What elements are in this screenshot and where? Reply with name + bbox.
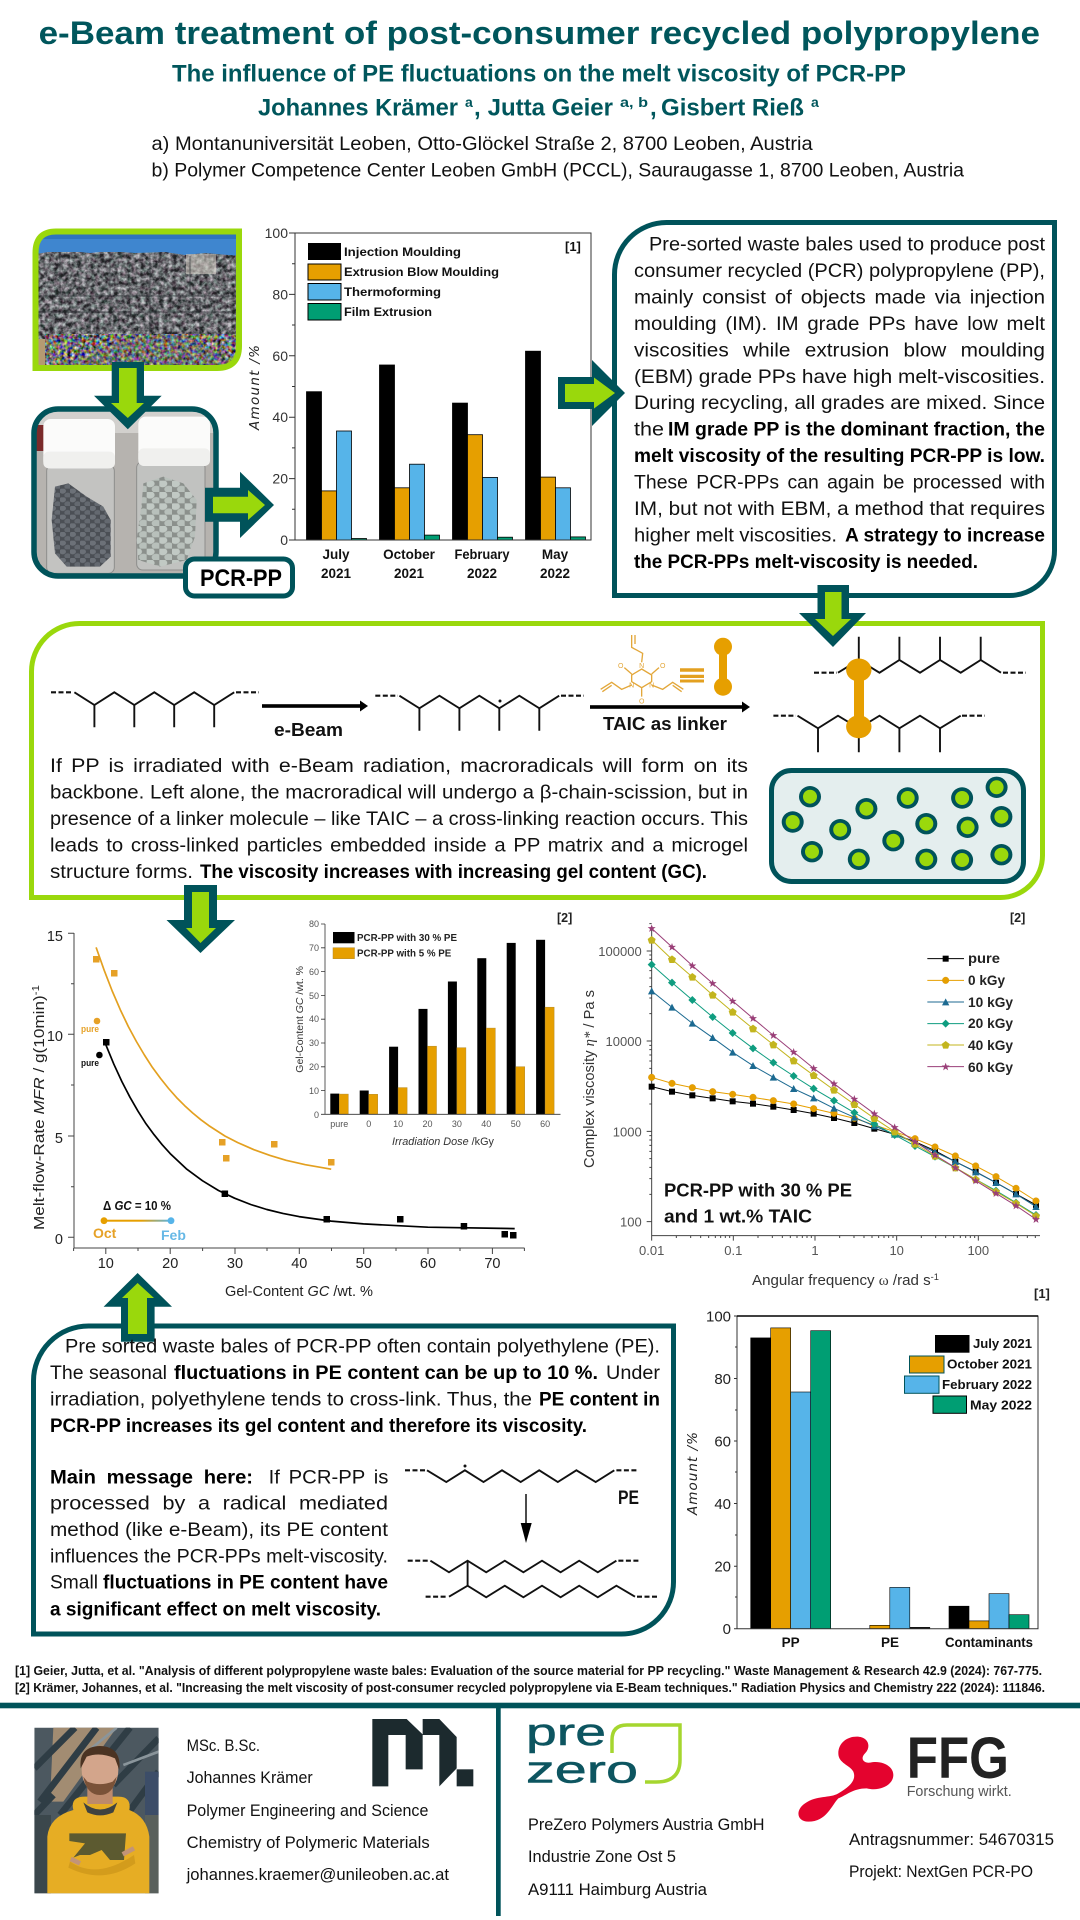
legend: Film Extrusion	[344, 305, 432, 319]
axis labels: 60	[272, 348, 288, 364]
photo: author portrait	[34, 1728, 159, 1893]
chart: MFR vs gel content: 70	[484, 1256, 500, 1272]
arrow: chart to text	[558, 360, 625, 426]
chain: cross-linked upper	[814, 637, 1026, 673]
panel: PE fluctuations	[34, 1273, 674, 1634]
chart: complex viscosity: 100	[620, 1215, 642, 1230]
arrow: e-Beam	[262, 700, 368, 740]
affiliations: a) Montanuniversität Leoben, Otto-Glöckel Straße 2, 8700 Leoben, Austria	[152, 133, 813, 155]
chart: complex viscosity: 0.1	[724, 1243, 742, 1258]
series: 10 kGy	[652, 991, 1036, 1207]
bar chart: amount by processing method: 2022	[467, 566, 497, 581]
authors: a, b	[620, 94, 648, 110]
panel: PE fluctuations: method (like e-Beam), its PE content	[50, 1519, 389, 1541]
panel: PE fluctuations: The seasonal	[50, 1362, 167, 1384]
authors: a	[465, 94, 473, 110]
paragraph: leads to cross-linked particles embedded inside a PP matrix and a microgel	[50, 835, 748, 857]
panel: recycling problem text: IM grade PP is the dominant fraction, the	[668, 419, 1045, 441]
PreZero address: A9111 Haimburg Austria	[528, 1881, 708, 1899]
inset chart: gel content vs dose: 10	[393, 1119, 403, 1129]
arrow: TAIC as linker: TAIC as linker	[603, 714, 727, 734]
chart: MFR vs gel content: 10	[47, 1029, 63, 1045]
legend: May 2022	[970, 1397, 1032, 1412]
bar chart: composition: 20	[714, 1558, 731, 1576]
arrow: panel to MFR chart	[166, 885, 235, 953]
bottle: dark pellets	[43, 419, 115, 573]
chart: complex viscosity: 100	[967, 1243, 989, 1258]
chain: cross-linked lower	[773, 716, 985, 752]
author details: MSc. B.Sc.	[187, 1737, 260, 1755]
series: 0 kGy	[652, 1077, 1036, 1201]
bar chart: amount by processing method: 2022	[540, 566, 570, 581]
authors: Jutta Geier	[488, 95, 613, 122]
inset chart: gel content vs dose: 0	[314, 1110, 319, 1120]
y axis title: Amount /%	[247, 345, 263, 431]
inset chart: gel content vs dose: 0	[366, 1119, 371, 1129]
legend: Injection Moulding	[344, 245, 461, 259]
arrow: TAIC as linker	[590, 702, 750, 734]
references	[15, 1663, 1045, 1695]
bar chart: amount by processing method: 2021	[321, 566, 352, 581]
panel: PE fluctuations: Small	[50, 1572, 98, 1594]
title: e-Beam treatment of post-consumer recycled polypropylene	[39, 15, 1040, 51]
bar chart: composition: 0	[723, 1621, 731, 1638]
TAIC molecule: N	[649, 682, 654, 689]
panel: recycling problem text: These PCR-PPs can again be processed with	[634, 472, 1045, 494]
FFG project details	[849, 1831, 1054, 1881]
chart: complex viscosity: 0.01	[639, 1243, 664, 1258]
panel: e-beam cross-linking	[32, 624, 1042, 898]
panel: recycling problem text: higher melt viscosities.	[634, 524, 837, 546]
authors	[258, 94, 819, 122]
arrow: e-Beam: e-Beam	[274, 720, 343, 740]
inset chart: gel content vs dose: 80	[309, 919, 319, 929]
chart: complex viscosity: 0 kGy	[968, 972, 1005, 988]
bar chart: composition: PP	[782, 1635, 800, 1650]
panel: recycling problem text: melt viscosity of the resulting PCR-PP is low.	[634, 445, 1045, 467]
chart: complex viscosity: 10	[889, 1243, 904, 1258]
chart: complex viscosity: 10 kGy	[968, 994, 1013, 1010]
panel: recycling problem text: (EBM) grade PPs have high melt-viscosities.	[634, 366, 1045, 388]
legend: October 2021	[947, 1357, 1032, 1372]
inset chart: gel content vs dose: Irradiation Dose /kGy	[392, 1136, 494, 1148]
authors: a	[811, 94, 819, 110]
PE chain radical	[405, 1464, 637, 1482]
authors: ,	[650, 95, 657, 122]
inset chart: gel content vs dose: 20	[422, 1119, 433, 1129]
legend	[904, 1335, 1032, 1413]
affiliations	[152, 133, 964, 182]
subtitle: The influence of PE fluctuations on the melt viscosity of PCR-PP	[172, 61, 906, 88]
legend: February 2022	[942, 1377, 1032, 1392]
inset chart: gel content vs dose: [2]	[557, 911, 572, 925]
bar chart: amount by processing method: February	[454, 547, 510, 562]
arrow: text to panel	[799, 585, 866, 647]
panel: recycling problem text: mainly consist of objects made via injection	[634, 286, 1045, 308]
legend: Thermoforming	[344, 285, 441, 299]
panel: recycling problem text: the PCR-PPs melt-viscosity is needed.	[634, 551, 978, 573]
microgel structure	[772, 770, 1024, 882]
fit curves	[106, 1045, 515, 1229]
cross-link dumbbell	[846, 658, 872, 738]
symbol: equivalent	[680, 668, 704, 682]
inset chart: gel content vs dose: 60	[309, 967, 319, 977]
delta GC annotation: Feb	[161, 1227, 186, 1243]
author details: Johannes Krämer	[187, 1769, 313, 1787]
bars	[306, 351, 586, 540]
chart: complex viscosity: [1]	[1034, 1286, 1050, 1301]
panel: recycling problem text: moulding (IM). IM grade PPs have low melt	[634, 313, 1046, 335]
delta GC annotation: Δ GC = 10 %	[103, 1199, 171, 1213]
chart: complex viscosity: 1000	[613, 1124, 642, 1139]
panel: PE fluctuations: irradiation, polyethylene tends to cross-link. Thus, the	[50, 1388, 532, 1410]
y axis title: -1	[31, 985, 42, 995]
author details: johannes.kraemer@unileoben.ac.at	[186, 1866, 449, 1884]
bar chart: composition: Amount /%	[685, 1432, 701, 1516]
series: 40 kGy	[652, 940, 1036, 1216]
TAIC molecule	[601, 635, 683, 706]
inset chart: gel content vs dose	[294, 911, 572, 1148]
chart: complex viscosity: 1	[811, 1243, 819, 1258]
PreZero address: Industrie Zone Ost 5	[528, 1848, 676, 1866]
bar chart: composition: 60	[714, 1434, 731, 1450]
y axis title: Complex viscosity η* / Pa s	[581, 990, 598, 1168]
chart: MFR vs gel content: 5	[55, 1131, 63, 1147]
delta GC annotation: Oct	[93, 1225, 117, 1241]
axis labels: 100	[265, 225, 288, 241]
chart annotation	[664, 1181, 852, 1227]
chart: complex viscosity: 20 kGy	[968, 1015, 1013, 1031]
arrow: PE reaction	[521, 1494, 532, 1543]
FFG project details: Projekt: NextGen PCR-PO	[849, 1863, 1033, 1881]
inset chart: gel content vs dose: 10	[309, 1086, 319, 1096]
inset chart: gel content vs dose: 70	[309, 943, 319, 953]
bar chart: amount by processing method: October	[383, 547, 436, 562]
panel: PE fluctuations: Main message here:	[50, 1466, 253, 1488]
inset chart: gel content vs dose: 50	[511, 1119, 521, 1129]
panel: recycling problem text: Pre-sorted waste bales used to produce post	[649, 234, 1046, 256]
bar chart: amount by processing method: 2021	[394, 566, 425, 581]
paragraph	[50, 755, 748, 883]
chart: MFR vs gel content: 30	[227, 1256, 243, 1272]
panel: PE fluctuations: fluctuations in PE content have	[103, 1572, 388, 1594]
TAIC molecule: O	[639, 699, 645, 706]
inset legend	[333, 932, 457, 960]
bar chart: composition	[685, 1308, 1038, 1650]
panel: recycling problem text: consumer recycled (PCR) polypropylene (PP),	[634, 260, 1045, 282]
chart: MFR vs gel content: 10	[98, 1256, 114, 1272]
chart annotation: PCR-PP with 30 % PE	[664, 1181, 852, 1201]
axis labels	[265, 225, 288, 548]
panel: PE fluctuations: fluctuations in PE content can be up to 10 %.	[174, 1362, 598, 1384]
authors: Gisbert Rieß	[661, 95, 804, 122]
bar chart: composition: Contaminants	[945, 1635, 1033, 1650]
logo: Montanuniversität	[372, 1719, 473, 1786]
inset chart: gel content vs dose: 50	[309, 991, 319, 1001]
inset chart: gel content vs dose: Gel-Content GC /wt. %	[294, 966, 306, 1073]
logo: PreZero	[526, 1712, 680, 1792]
logo: FFG: FFG	[907, 1726, 1009, 1791]
data points	[96, 1039, 516, 1238]
legend: July 2021	[973, 1336, 1032, 1351]
chart: complex viscosity: 10000	[606, 1034, 642, 1049]
paragraph: backbone. Left alone, the macroradical will undergo a β-chain-scission, but in	[50, 782, 748, 804]
TAIC molecule: N	[639, 663, 644, 670]
PCR-PP label	[186, 559, 292, 596]
axis labels: 40	[272, 409, 288, 425]
footer dividers	[0, 1703, 1080, 1916]
chart: complex viscosity	[581, 911, 1050, 1301]
chain: macroradical	[375, 696, 584, 731]
chart: MFR vs gel content: pure	[81, 1058, 99, 1069]
bar chart: amount by processing method	[247, 225, 591, 581]
bar chart: amount by processing method: July	[322, 547, 350, 562]
inset chart: gel content vs dose: 20	[309, 1062, 319, 1072]
chart: MFR vs gel content: 15	[47, 929, 63, 945]
chart: complex viscosity: 60 kGy	[968, 1059, 1013, 1075]
chart: complex viscosity: pure	[968, 950, 1000, 966]
chart: MFR vs gel content: 40	[291, 1256, 307, 1272]
TAIC molecule: N	[629, 682, 634, 689]
chart: complex viscosity: 40 kGy	[968, 1037, 1013, 1053]
logo: PreZero: pre	[526, 1712, 606, 1754]
paragraph: If PP is irradiated with e-Beam radiation, macroradicals will form on its	[50, 755, 748, 777]
panel: recycling problem text	[614, 222, 1054, 596]
panel: recycling problem text: the	[634, 419, 664, 441]
panel: recycling problem text: IM, but not with EBM, a method that requires	[634, 498, 1045, 520]
paragraph: The viscosity increases with increasing gel content (GC).	[200, 861, 707, 883]
author details: Chemistry of Polymeric Materials	[187, 1834, 430, 1852]
FFG project details: Antragsnummer: 54670315	[849, 1831, 1054, 1849]
inset chart: gel content vs dose: 60	[540, 1119, 550, 1129]
legend: Extrusion Blow Moulding	[344, 265, 499, 279]
panel: PE fluctuations: PE content in	[539, 1388, 660, 1410]
series: pure	[652, 1087, 1036, 1205]
affiliations: b) Polymer Competence Center Leoben GmbH (PCCL), Sauraugasse 1, 8700 Leoben, Austria	[152, 160, 964, 182]
panel: recycling problem text: A strategy to increase	[845, 524, 1045, 546]
author details	[186, 1737, 449, 1884]
chart: MFR vs gel content: 0	[55, 1232, 63, 1248]
arrow: panel to MFR chart	[104, 1273, 172, 1342]
chart: MFR vs gel content: 20	[162, 1256, 178, 1272]
inset chart: gel content vs dose: 40	[481, 1119, 491, 1129]
photo: waste bales	[33, 229, 243, 369]
photo: PCR-PP bottles	[34, 409, 216, 576]
authors: Johannes Krämer	[258, 95, 458, 122]
chart: MFR vs gel content: 50	[356, 1256, 372, 1272]
bar chart: composition: 80	[714, 1371, 731, 1388]
panel: PE fluctuations: PCR-PP increases its gel content and therefore its viscosity.	[50, 1415, 587, 1437]
inset chart: gel content vs dose: pure	[330, 1119, 348, 1129]
inset legend: PCR-PP with 5 % PE	[357, 948, 452, 960]
references: [1] Geier, Jutta, et al. "Analysis of different polypropylene waste bales: Evaluation of the source material for PP recycling." Waste Management & Research 42.9 (2024): 767-775.	[15, 1663, 1042, 1678]
panel: recycling problem text: viscosities while extrusion blow moulding	[634, 339, 1045, 361]
panel: PE fluctuations: processed by a radical mediated	[50, 1493, 388, 1515]
PreZero address: PreZero Polymers Austria GmbH	[528, 1816, 764, 1834]
icon: linker dumbbell	[714, 638, 732, 696]
bar chart: amount by processing method: [1]	[565, 239, 581, 254]
chain: polypropylene	[51, 692, 259, 727]
inset chart: gel content vs dose: 30	[452, 1119, 462, 1129]
arrow: bales to bottles	[94, 362, 162, 429]
panel: PE fluctuations: Under	[606, 1362, 661, 1384]
chart: MFR vs gel content: pure	[81, 1024, 99, 1035]
series: 20 kGy	[652, 965, 1036, 1215]
chart: MFR vs gel content	[31, 929, 524, 1300]
PreZero address	[528, 1816, 764, 1899]
logo: FFG	[798, 1726, 1012, 1822]
x axis title: Gel-Content GC /wt. %	[225, 1283, 373, 1300]
bottle: light pellets	[137, 417, 210, 570]
PE chains cross-linked	[408, 1561, 658, 1597]
axis labels: 0	[280, 532, 288, 548]
chart: MFR vs gel content: 60	[420, 1256, 436, 1272]
panel: PE fluctuations: Pre sorted waste bales of PCR-PP often contain polyethylene (PE).	[65, 1336, 660, 1358]
x axis title: Angular frequency ω /rad s	[752, 1273, 929, 1289]
panel: PE fluctuations: If PCR-PP is	[269, 1466, 389, 1488]
delta GC annotation	[93, 1199, 186, 1243]
inset chart: gel content vs dose: 30	[309, 1038, 319, 1048]
paragraph: structure forms.	[50, 861, 193, 883]
series: 60 kGy	[652, 928, 1036, 1219]
arrow: bottles to chart	[205, 472, 274, 538]
PCR-PP label: PCR-PP	[200, 565, 282, 592]
author details: Polymer Engineering and Science	[187, 1802, 428, 1820]
bar chart: composition: 40	[714, 1496, 731, 1513]
logo: PreZero: zero	[526, 1750, 638, 1792]
legend	[308, 243, 499, 320]
legend lines	[927, 959, 964, 1067]
axis labels: 20	[272, 471, 288, 487]
bar chart: composition: PE	[881, 1635, 899, 1650]
inset legend: PCR-PP with 30 % PE	[357, 933, 457, 944]
panel: recycling problem text: During recycling, all grades are mixed. Since	[634, 392, 1045, 414]
TAIC molecule: O	[618, 663, 624, 670]
x axis title: -1	[931, 1272, 939, 1282]
chart annotation: and 1 wt.% TAIC	[664, 1207, 812, 1227]
logo: FFG: Forschung wirkt.	[907, 1784, 1012, 1800]
chart: complex viscosity: [2]	[1010, 911, 1025, 925]
TAIC molecule: O	[660, 663, 666, 670]
panel: PE fluctuations: PE	[618, 1488, 639, 1509]
authors: ,	[474, 95, 481, 122]
chart: complex viscosity: 100000	[598, 944, 642, 959]
panel: PE fluctuations: influences the PCR-PPs melt-viscosity.	[50, 1545, 388, 1567]
inset chart: gel content vs dose: 40	[309, 1014, 319, 1024]
paragraph: presence of a linker molecule – like TAIC – a cross-linking reaction occurs. This	[50, 808, 748, 830]
panel: PE fluctuations: a significant effect on melt viscosity.	[50, 1598, 381, 1620]
bar chart: amount by processing method: May	[542, 547, 569, 562]
bar chart: composition: 100	[706, 1308, 731, 1326]
axis labels: 80	[272, 286, 288, 302]
y axis title: Melt-flow-Rate MFR / g(10min)	[31, 1006, 48, 1230]
